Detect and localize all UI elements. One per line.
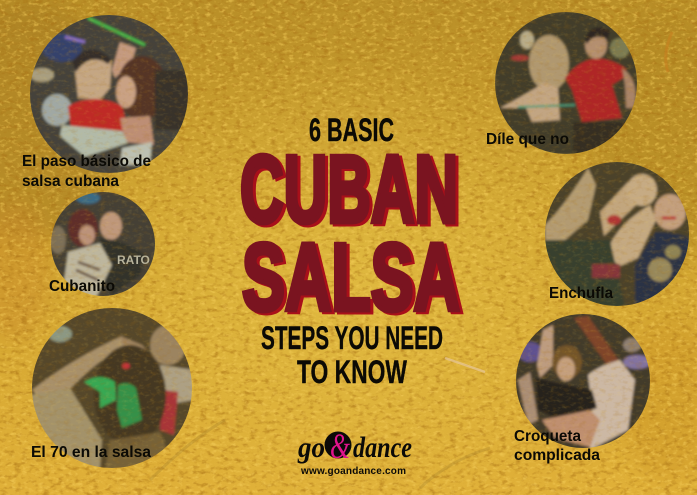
title: Cuban Salsa [240, 136, 463, 333]
logo: go & dance: dance [353, 431, 412, 464]
caption: Enchufla: Enchufla [549, 285, 613, 302]
photo: El paso básico de salsa cubana [28, 13, 190, 175]
title line: Salsa shadow: SALSA [245, 226, 463, 333]
logo url: www.goandance.com [300, 466, 406, 477]
logo: go & dance: & [330, 426, 350, 466]
photo: Croqueta complicada [514, 312, 652, 450]
heading: 6 basic: 6 BASIC [309, 112, 394, 148]
caption: El paso básico de salsa cubana: El paso básico de [22, 153, 151, 170]
subheading: to know: TO KNOW [297, 354, 408, 390]
caption: El 70 en la salsa: El 70 en la salsa [31, 444, 151, 461]
logo: go & dance: go [297, 431, 325, 464]
photo: Enchufla [543, 160, 692, 308]
caption: Cubanito: Cubanito [49, 278, 115, 295]
caption: Croqueta complicada [514, 428, 600, 464]
caption: Croqueta complicada: complicada [514, 447, 600, 464]
caption: Díle que no: Díle que no [486, 131, 569, 148]
caption: Croqueta complicada: Croqueta [514, 428, 581, 445]
caption: El paso básico de salsa cubana: salsa cubana [22, 173, 119, 190]
logo: go & dance [297, 426, 412, 466]
caption: El paso básico de salsa cubana [22, 153, 151, 190]
photo: Cubanito: RATO [117, 253, 150, 267]
title line: Salsa: SALSA [242, 224, 460, 331]
subheading: steps you need: STEPS YOU NEED [261, 320, 443, 356]
photo: Díle que no [494, 11, 638, 158]
photo: Cubanito [50, 190, 158, 300]
title line: Cuban: CUBAN [240, 136, 458, 243]
title line: Cuban shadow: CUBAN [243, 138, 461, 245]
photo: El 70 en la salsa [30, 306, 194, 470]
